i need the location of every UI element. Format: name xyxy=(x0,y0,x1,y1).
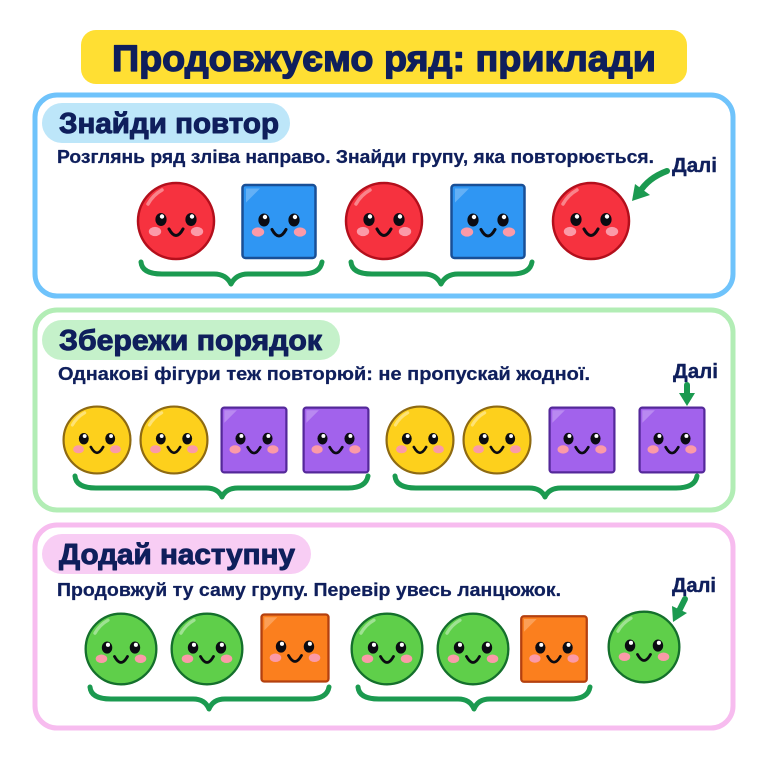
green circle 2 xyxy=(172,614,242,684)
instruction text: Продовжуй ту саму групу. Перевір увесь ланцюжок. xyxy=(57,580,561,600)
purple square 1 xyxy=(222,408,286,472)
blue square 1 xyxy=(242,185,316,258)
green circle 5 xyxy=(609,612,679,682)
next label: Далі xyxy=(672,575,716,597)
purple square 3 xyxy=(550,408,614,472)
red circle 3 xyxy=(553,183,629,259)
instruction text: Однакові фігури теж повторюй: не пропускай жодної. xyxy=(58,364,590,384)
orange square 1 xyxy=(262,615,328,681)
yellow circle 2 xyxy=(141,407,207,473)
heading: find the repeat xyxy=(42,103,290,143)
next label: Далі xyxy=(672,155,717,177)
orange square 2 xyxy=(521,616,587,682)
brace 1 xyxy=(90,687,329,709)
brace 2 xyxy=(395,476,697,497)
green circle 4 xyxy=(438,614,508,684)
heading: keep the order: Збережи порядок xyxy=(59,325,322,357)
yellow circle 1 xyxy=(64,407,130,473)
green circle 1 xyxy=(86,614,156,684)
yellow circle 4 xyxy=(464,407,530,473)
arrow to next xyxy=(632,171,667,201)
red circle 1 xyxy=(138,183,214,259)
title xyxy=(81,30,687,84)
panel: find the repeat xyxy=(35,95,733,296)
red circle 2 xyxy=(346,183,422,259)
next label: Далі xyxy=(673,361,718,383)
yellow circle 3 xyxy=(387,407,453,473)
brace 1 xyxy=(75,476,368,497)
heading: keep the order xyxy=(42,320,340,360)
panel: keep the order xyxy=(35,310,733,510)
arrow to next xyxy=(679,385,695,406)
panel: add the next xyxy=(35,525,733,728)
brace 2 xyxy=(351,262,532,284)
brace 1 xyxy=(141,262,322,284)
instruction text: Розглянь ряд зліва направо. Знайди групу, яка повторюється. xyxy=(57,147,654,167)
blue square 2 xyxy=(452,185,524,258)
heading: add the next: Додай наступну xyxy=(59,539,295,571)
heading: add the next xyxy=(42,534,311,574)
purple square 4 xyxy=(640,408,704,472)
heading: find the repeat: Знайди повтор xyxy=(59,108,279,140)
brace 2 xyxy=(358,687,590,709)
title: Продовжуємо ряд: приклади xyxy=(112,38,656,79)
arrow to next xyxy=(672,599,687,622)
green circle 3 xyxy=(352,614,422,684)
purple square 2 xyxy=(304,408,368,472)
